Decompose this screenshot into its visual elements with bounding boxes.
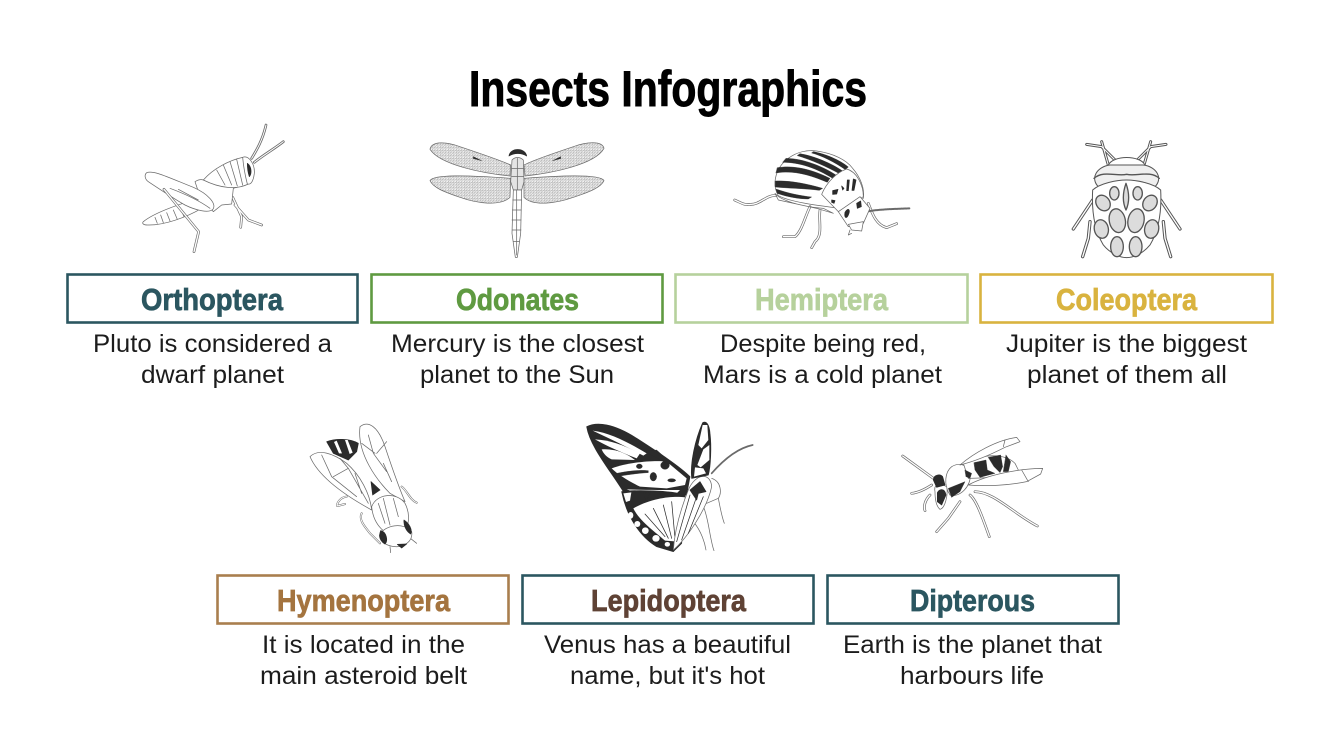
description: It is located in the — [262, 631, 465, 659]
panel: Odonates — [372, 143, 662, 389]
description — [1006, 330, 1247, 389]
description: planet to the Sun — [420, 361, 614, 389]
description: Pluto is considered a — [93, 330, 332, 358]
description: main asteroid belt — [260, 662, 467, 690]
box — [676, 274, 968, 322]
heading: Odonates — [456, 282, 579, 317]
box — [372, 274, 662, 322]
description: Despite being red, — [720, 330, 926, 358]
panel: Hemiptera — [676, 151, 968, 389]
description — [93, 330, 332, 389]
heading: Coleoptera — [1056, 282, 1198, 317]
icon: wasp — [903, 437, 1043, 537]
description: Mercury is the closest — [391, 330, 644, 358]
description: Venus has a beautiful — [544, 631, 791, 659]
description — [544, 631, 791, 690]
description: Earth is the planet that — [843, 631, 1102, 659]
panel: Dipterous — [828, 437, 1118, 690]
icon: spotted beetle — [1073, 142, 1180, 258]
box — [828, 576, 1118, 624]
panel: Coleoptera — [980, 142, 1272, 389]
icon: bee — [310, 424, 417, 553]
description: Jupiter is the biggest — [1006, 330, 1247, 358]
box — [68, 274, 358, 322]
heading: Hemiptera — [755, 282, 889, 317]
panel: Lepidoptera — [522, 422, 814, 690]
description — [843, 631, 1102, 690]
box — [980, 274, 1272, 322]
description: Mars is a cold planet — [703, 361, 942, 389]
description: planet of them all — [1027, 361, 1227, 389]
description — [260, 631, 467, 690]
description: name, but it's hot — [570, 662, 765, 690]
panel: Hymenoptera — [218, 424, 508, 690]
description: harbours life — [900, 662, 1044, 690]
description: dwarf planet — [141, 361, 284, 389]
icon: dragonfly — [430, 143, 604, 257]
heading: Lepidoptera — [591, 583, 747, 618]
heading: Hymenoptera — [277, 583, 451, 618]
icon: striped beetle — [735, 151, 909, 248]
panel: Orthoptera — [68, 125, 358, 389]
heading: Orthoptera — [141, 282, 284, 317]
box — [522, 576, 814, 624]
icon: butterfly — [587, 422, 753, 552]
heading: Dipterous — [910, 583, 1035, 618]
box — [218, 576, 508, 624]
description — [391, 330, 644, 389]
title: Insects Infographics — [469, 61, 867, 117]
icon: grasshopper — [143, 125, 283, 252]
description — [703, 330, 942, 389]
